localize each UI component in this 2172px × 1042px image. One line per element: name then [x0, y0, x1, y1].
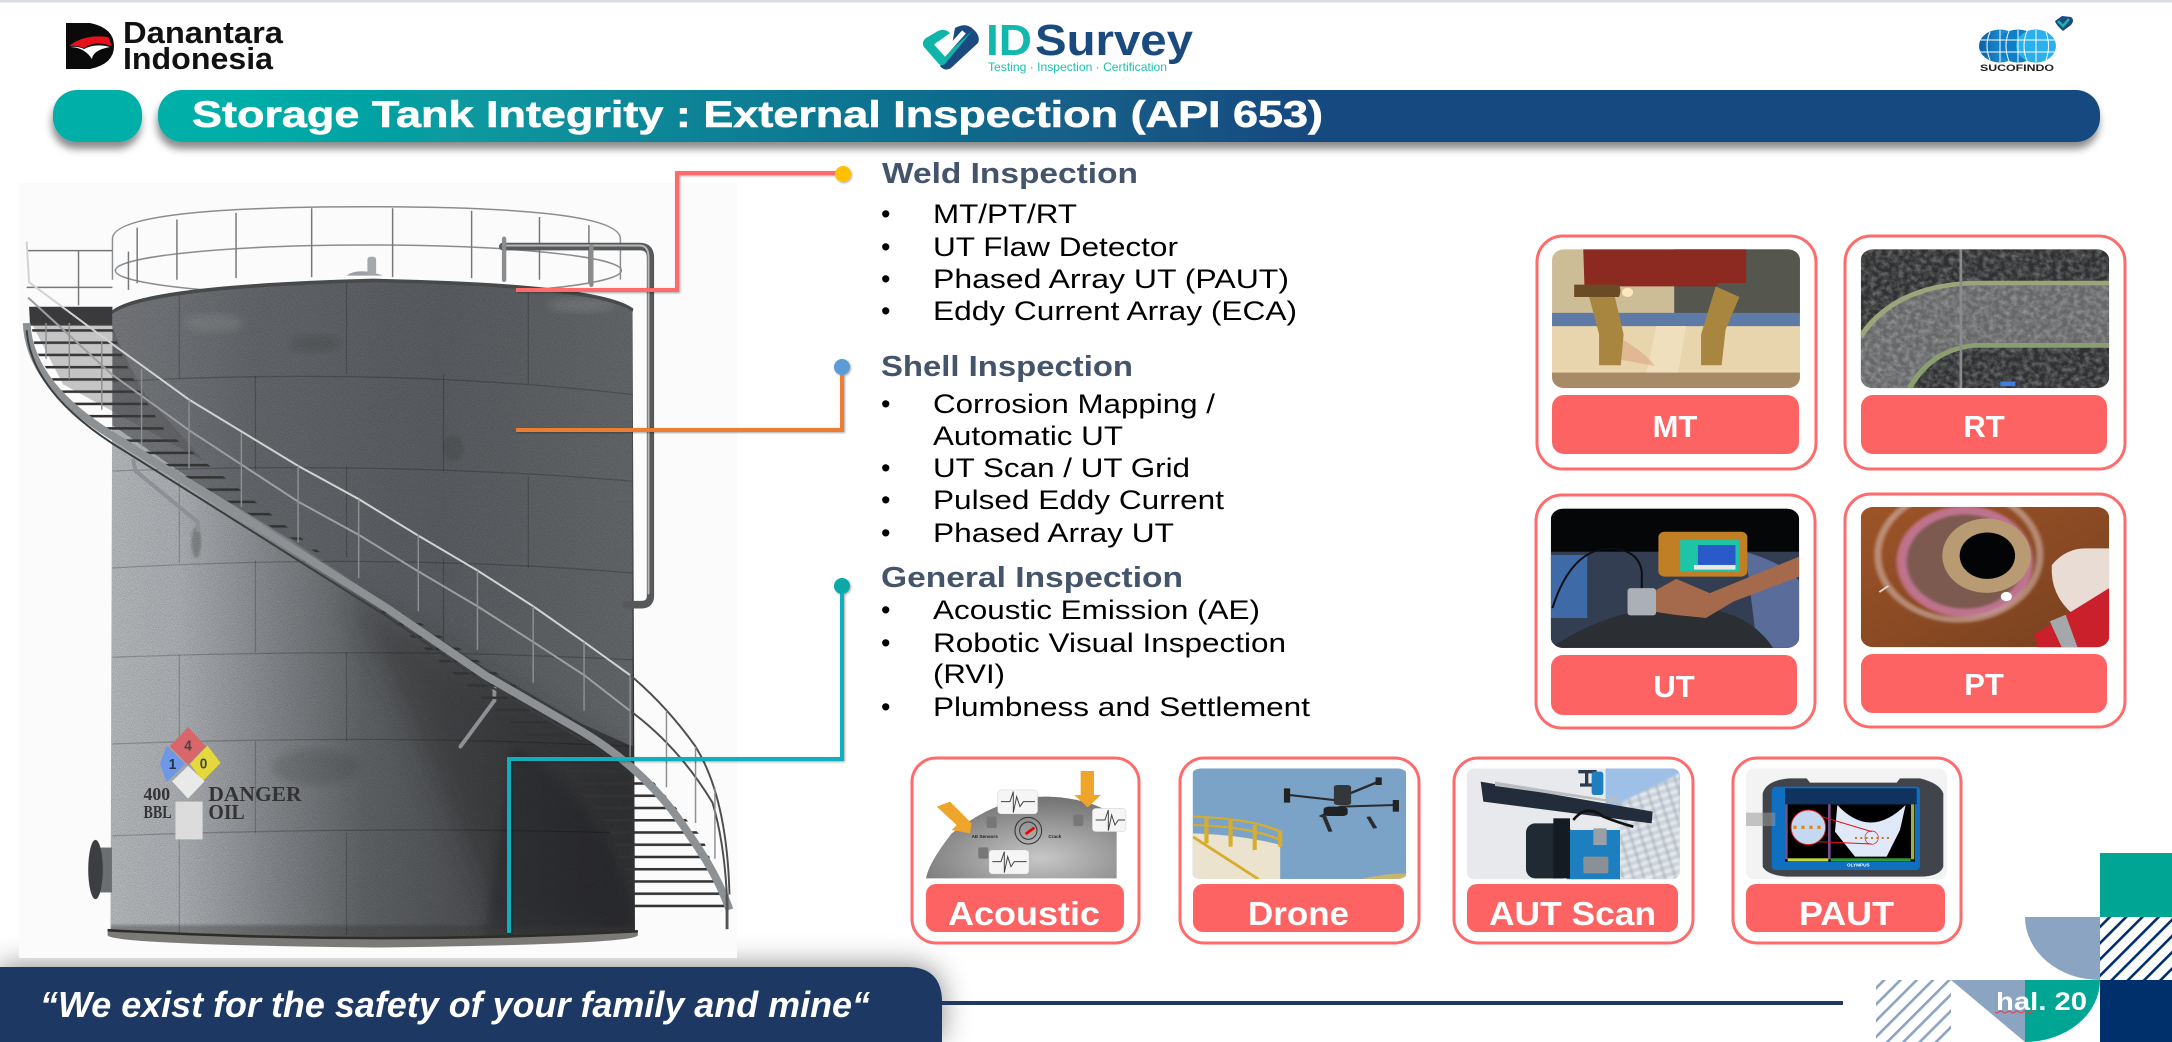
card: Drone: Drone — [1248, 895, 1349, 932]
photo panel: storage tank — [19, 183, 737, 958]
text block: general inspection: Plumbness and Settlement — [933, 692, 1311, 722]
tank stencil lettering: OIL — [208, 799, 245, 824]
corner decoration — [1876, 853, 2172, 1042]
text block: shell inspection: • — [881, 389, 890, 419]
logo: Danantara Indonesia — [66, 15, 284, 76]
tank base ring — [108, 930, 638, 948]
dot: weld — [835, 166, 851, 182]
motto: “We exist for the safety of your family and mine“ — [40, 984, 870, 1025]
tank stencil lettering — [143, 782, 302, 824]
logo: Danantara Indonesia: Danantara — [123, 15, 284, 50]
photo: RT radiograph — [1861, 249, 2109, 388]
text block: shell inspection: Corrosion Mapping / — [933, 389, 1216, 419]
photo: PT penetrant — [1861, 490, 2109, 647]
label: Drone — [1193, 884, 1404, 932]
text block: shell inspection: • — [881, 485, 890, 515]
photo: UT flaw detector — [1551, 509, 1799, 648]
footer panel with motto — [0, 967, 942, 1042]
tank roof railing — [27, 207, 621, 305]
label: UT — [1551, 655, 1797, 715]
text block: weld inspection: Phased Array UT (PAUT) — [933, 264, 1289, 294]
logo: ID Survey: Survey — [1035, 16, 1194, 65]
tank stair handrails — [27, 241, 729, 900]
card: PAUT: PAUT — [1799, 895, 1894, 932]
text block: shell inspection: Phased Array UT — [933, 518, 1174, 548]
dot: shell — [834, 359, 850, 375]
photo: drone over tank — [1193, 768, 1406, 879]
connector: weld (red) — [516, 166, 851, 290]
text block: general inspection — [881, 562, 1311, 722]
photo: PAUT instrument — [1746, 768, 1947, 879]
tank stencil lettering: 400 — [143, 784, 170, 804]
photo: acoustic emission diagram: AE Sensors — [972, 834, 998, 839]
tank shell — [111, 280, 635, 940]
text block: general inspection: • — [881, 692, 890, 722]
text block: weld inspection: UT Flaw Detector — [933, 232, 1178, 262]
logo: Danantara Indonesia: Indonesia — [123, 41, 274, 76]
hazard diamond: 4 — [184, 737, 192, 754]
label: PT — [1861, 654, 2107, 713]
logo: ID Survey: Testing · Inspection · Certification — [988, 60, 1167, 74]
card: MT: MT — [1653, 409, 1697, 444]
heading: shell inspection: Shell Inspection — [881, 351, 1133, 383]
label: Acoustic — [926, 884, 1124, 932]
text block: shell inspection — [881, 351, 1225, 548]
card: UT: UT — [1653, 669, 1695, 704]
dot: general — [834, 578, 850, 594]
text block: weld inspection: • — [881, 264, 890, 294]
photo: PAUT instrument: OLYMPUS — [1847, 863, 1870, 868]
card: AUT Scan — [1454, 758, 1693, 943]
text block: shell inspection: Pulsed Eddy Current — [933, 485, 1225, 515]
label: AUT Scan — [1467, 884, 1678, 932]
tank top rim — [111, 279, 634, 314]
card: PT: PT — [1964, 667, 2004, 702]
tank outlet flange — [88, 840, 112, 899]
card: Acoustic: Acoustic — [948, 895, 1100, 932]
text block: weld inspection: • — [881, 199, 890, 229]
photo: MT yoke — [1552, 249, 1801, 388]
heading: general inspection: General Inspection — [881, 562, 1183, 594]
label: MT — [1552, 395, 1799, 454]
tank landing — [29, 307, 112, 326]
heading: weld inspection: Weld Inspection — [882, 158, 1138, 190]
plate seams — [112, 280, 633, 935]
logo: ID Survey — [923, 16, 1194, 74]
text block: weld inspection: MT/PT/RT — [933, 199, 1077, 229]
label: PAUT — [1746, 884, 1945, 932]
text block: general inspection: (RVI) — [933, 659, 1005, 689]
card: Drone — [1180, 758, 1419, 943]
text block: general inspection: • — [881, 628, 890, 658]
card: PAUT — [1733, 758, 1961, 943]
text block: shell inspection: • — [881, 453, 890, 483]
tank stair treads — [32, 326, 334, 563]
hazard diamond — [160, 727, 221, 799]
text block: general inspection: Acoustic Emission (AE) — [933, 595, 1260, 625]
card: RT — [1845, 236, 2125, 469]
tank stair stringer — [27, 323, 729, 910]
title bar — [53, 90, 2100, 142]
photo: AUT scanner — [1467, 768, 1680, 879]
text block: weld inspection: Eddy Current Array (ECA) — [933, 296, 1297, 326]
tank stencil lettering: DANGER — [208, 782, 302, 806]
logo: Sucofindo — [1979, 16, 2073, 74]
card: MT — [1537, 236, 1816, 469]
tank pipework — [133, 239, 650, 747]
text block: weld inspection: • — [881, 296, 890, 326]
connector: general (teal) — [509, 578, 850, 933]
hazard diamond: 1 — [169, 756, 177, 772]
hazard diamond: 0 — [200, 755, 208, 772]
card: Acoustic — [912, 758, 1139, 943]
page number: hal. 20 — [1996, 988, 2087, 1016]
connector: shell (orange) — [516, 359, 850, 430]
card: UT — [1536, 495, 1815, 728]
text block: shell inspection: Automatic UT — [933, 421, 1123, 451]
card: RT: RT — [1963, 409, 2005, 444]
tank stencil lettering: BBL — [143, 802, 172, 822]
logo: ID Survey: ID — [986, 16, 1032, 65]
text block: shell inspection: • — [881, 518, 890, 548]
text block: weld inspection — [881, 158, 1297, 326]
card: PT — [1845, 490, 2125, 727]
text block: general inspection: • — [881, 595, 890, 625]
photo: acoustic emission diagram: Crack — [1048, 834, 1062, 839]
text block: shell inspection: UT Scan / UT Grid — [933, 453, 1190, 483]
text block: general inspection: Robotic Visual Inspection — [933, 628, 1286, 658]
text block: weld inspection: • — [881, 232, 890, 262]
card: AUT Scan: AUT Scan — [1489, 895, 1656, 932]
title: Storage Tank Integrity : External Inspection (API 653) — [192, 94, 1323, 135]
photo: acoustic emission diagram — [926, 771, 1126, 878]
label: RT — [1861, 395, 2107, 454]
logo: Sucofindo: SUCOFINDO — [1980, 63, 2054, 74]
